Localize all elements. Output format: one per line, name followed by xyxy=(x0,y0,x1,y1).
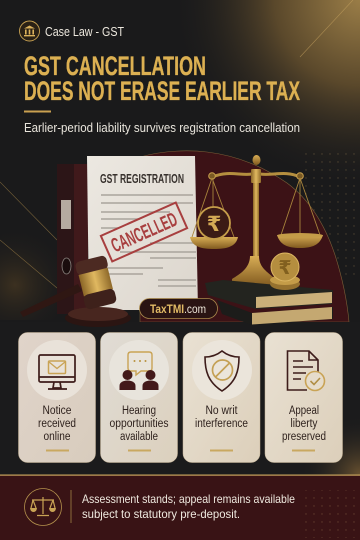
card: notice xyxy=(18,332,96,462)
card: no writ xyxy=(183,332,260,462)
card text: No writ xyxy=(206,405,238,417)
title xyxy=(24,51,300,106)
card text: interference xyxy=(195,418,248,430)
card: hearing xyxy=(100,332,178,462)
icon: shield xyxy=(205,351,239,391)
brand pill xyxy=(140,298,218,318)
icon: scales xyxy=(24,488,62,526)
card text: preserved xyxy=(282,431,326,443)
scales xyxy=(190,155,323,286)
stamp: cancelled xyxy=(101,203,187,261)
icon: monitor envelope xyxy=(39,355,75,389)
icon: document check xyxy=(288,351,324,390)
card text: opportunities xyxy=(110,418,169,430)
header badge xyxy=(20,21,124,41)
card text: online xyxy=(44,431,70,443)
gavel xyxy=(20,255,131,327)
card text: received xyxy=(38,418,76,430)
footer band xyxy=(0,474,360,540)
floor xyxy=(0,322,360,475)
card text xyxy=(38,405,76,443)
icon: institution xyxy=(20,21,40,41)
footer text: Assessment stands; appeal remains available xyxy=(82,492,295,506)
coin: rupee left: ₹ xyxy=(207,212,221,236)
hero illustration xyxy=(0,151,360,475)
document xyxy=(87,156,198,310)
card text xyxy=(195,405,248,430)
card text: available xyxy=(120,431,158,443)
binder xyxy=(57,164,88,314)
books xyxy=(205,280,333,325)
card text: Notice xyxy=(42,405,72,417)
brand pill: TaxTMI.com xyxy=(150,302,206,316)
card text xyxy=(110,405,169,443)
card text: Appeal xyxy=(289,405,319,417)
title: GST CANCELLATION xyxy=(24,51,206,81)
coins: ₹ xyxy=(278,257,292,279)
subtitle: Earlier-period liability survives registration cancellation xyxy=(24,121,300,135)
stamp: cancelled: CANCELLED xyxy=(108,209,181,257)
footer text: subject to statutory pre-deposit. xyxy=(82,507,240,521)
icon: people speech xyxy=(120,352,158,390)
footer text xyxy=(82,492,295,521)
badge label: Case Law - GST xyxy=(45,25,124,39)
maroon dome xyxy=(140,151,349,322)
document: GST REGISTRATION xyxy=(100,172,184,186)
coins xyxy=(270,253,300,290)
card text: Hearing xyxy=(122,405,156,417)
card: appeal xyxy=(265,332,342,462)
card text: liberty xyxy=(290,418,318,430)
card text xyxy=(282,405,326,443)
